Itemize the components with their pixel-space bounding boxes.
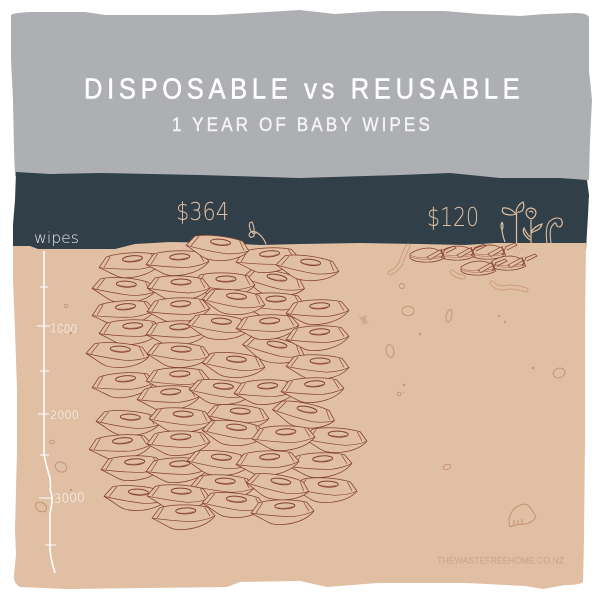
wipe pack: [91, 298, 156, 328]
wipe pack: [152, 504, 215, 531]
reusable price: $120: [427, 203, 479, 233]
wipe pack: [188, 378, 253, 407]
wipe pack: [98, 318, 163, 346]
wipe pack: [91, 276, 156, 304]
wipe pack: [146, 296, 211, 324]
worm outline: [390, 246, 526, 290]
wipe pack: [201, 491, 266, 520]
wipe pack: [147, 430, 210, 457]
title: DISPOSABLE vs REUSABLE: [84, 72, 520, 105]
wipe pack: [186, 313, 251, 342]
wipe pack: [95, 409, 160, 437]
reusable stack: [410, 246, 456, 262]
wipe pack: [294, 477, 357, 504]
wipe pack: [251, 499, 314, 526]
wipe pack: [233, 378, 298, 406]
wipe pack: [98, 250, 163, 280]
worm body: [390, 246, 526, 290]
wipe pack: [192, 273, 255, 298]
wipe pack: [288, 451, 353, 479]
icon: bug: [358, 315, 369, 325]
wipe pack: [146, 367, 209, 394]
panel: soil ground: [13, 242, 586, 589]
chart: disposable wipe pile: [85, 233, 367, 531]
wipe pack: [145, 249, 210, 277]
axis line: [44, 251, 55, 573]
wipe pack: [286, 354, 349, 380]
subtitle: 1 YEAR OF BABY WIPES: [172, 113, 430, 135]
panel: grey sky header: [11, 10, 592, 180]
wipe pack: [240, 333, 307, 368]
panel: dark band: [13, 172, 589, 252]
icon: shell: [509, 504, 536, 527]
wipe pack: [147, 342, 210, 369]
wipe pack: [136, 384, 201, 412]
wipe pack: [242, 293, 305, 318]
wipe pack: [186, 449, 251, 478]
wipe pack: [191, 474, 254, 501]
wipe pack: [270, 398, 337, 433]
axis label 3000: 3000: [53, 489, 85, 506]
icon: sprout: [249, 222, 266, 244]
seedling: [502, 202, 524, 243]
chart: reusable wipes: [410, 243, 537, 275]
reusable stack: [491, 254, 537, 270]
stones: [34, 284, 566, 514]
wipe pack: [100, 454, 165, 482]
wipe pack: [149, 407, 212, 434]
specks: [62, 315, 534, 491]
worms: [390, 246, 526, 290]
bud: [501, 222, 505, 242]
wipe pack: [252, 425, 315, 452]
website credit: THEWASTEFREEHOME.CO.NZ: [437, 555, 565, 566]
wipe pack: [145, 319, 210, 347]
wipe pack: [85, 341, 150, 369]
disposable price: $364: [176, 197, 229, 226]
axis label 2000: 2000: [50, 408, 79, 422]
axis label 1000: 1000: [50, 321, 78, 336]
wipe pack: [235, 449, 300, 477]
wipe pack: [103, 484, 168, 512]
wipe pack: [147, 276, 210, 300]
wipe pack: [145, 456, 210, 484]
flower: [523, 208, 542, 243]
icon: plants: [501, 202, 562, 255]
wipe pack: [88, 432, 153, 462]
wipe pack: [285, 298, 350, 326]
wipe pack: [201, 418, 266, 448]
reusable stack: [471, 243, 517, 259]
axis title: wipes: [34, 229, 79, 247]
wipe pack: [245, 471, 310, 504]
reusable stack: [440, 244, 486, 260]
wipe pack: [205, 403, 270, 431]
fern: [546, 218, 562, 243]
wipe pack: [285, 324, 350, 352]
axis: wipes count scale: [37, 251, 56, 573]
reusable stack: [461, 259, 507, 275]
soil stones and specks: [34, 284, 566, 527]
wipe pack: [280, 376, 345, 404]
wipe pack: [201, 287, 266, 317]
wipe pack: [185, 233, 250, 263]
wipe pack: [147, 484, 210, 511]
wipe pack: [91, 370, 156, 400]
wipe pack: [235, 246, 300, 275]
wipe pack: [201, 351, 266, 380]
roots: [508, 245, 524, 255]
axis ticks: [37, 287, 56, 545]
wipe pack: [240, 266, 307, 301]
wipe pack: [275, 253, 340, 284]
wipe pack: [235, 313, 300, 341]
wipe pack: [304, 427, 367, 454]
